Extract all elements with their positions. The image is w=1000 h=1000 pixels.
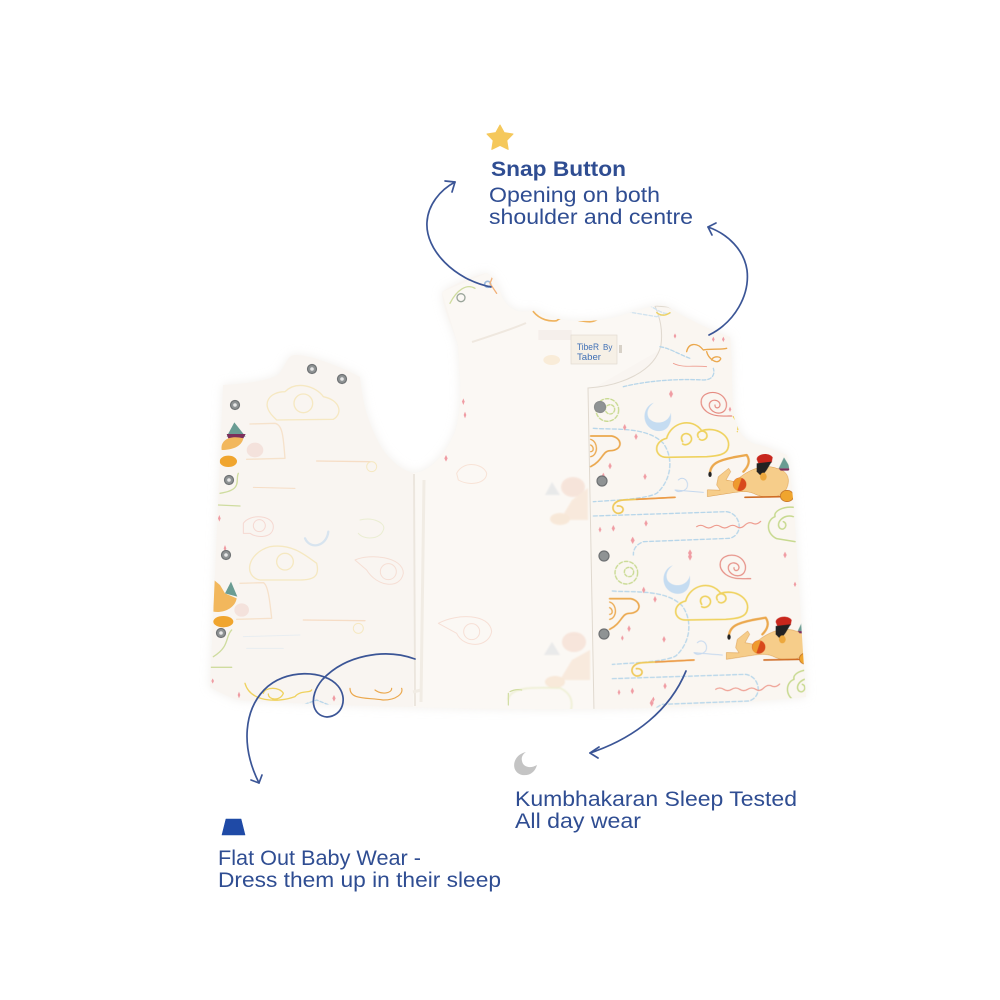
icon: yellow star [487, 125, 513, 149]
back panel [413, 273, 660, 710]
neck label tag: Taber [577, 352, 601, 363]
text: Flat Out Baby Wear: Dress them up in their sleep [218, 869, 501, 892]
icon: blue trapezoid [222, 819, 245, 835]
print seen on left edge and hem of left panel [210, 398, 522, 708]
neck label tag: TibeR [577, 342, 599, 353]
text: Kumbhakaran Sleep Tested [515, 788, 797, 833]
right panel print pattern [591, 390, 814, 721]
text: Kumbhakaran Sleep Tested: All day wear [515, 810, 641, 833]
heading: Snap Button: Snap Button [491, 158, 626, 181]
text: Kumbhakaran Sleep Tested: Kumbhakaran Sleep Tested [515, 788, 797, 811]
back collar print [533, 312, 598, 365]
icon: grey crescent moon [514, 752, 537, 775]
front right panel [588, 306, 671, 709]
garment: open baby vest [200, 260, 820, 721]
garment body and prints [200, 260, 820, 721]
arrow: shoulder snap to heading [427, 181, 491, 287]
arrow: hem to sleep tested [590, 671, 686, 758]
right shoulder print [623, 305, 796, 702]
back shoulder seam [472, 323, 526, 342]
arrow: right shoulder to heading [708, 223, 747, 335]
strap print on left back shoulder [450, 275, 497, 303]
arrow: looped arrow to flat out baby wear [247, 654, 415, 783]
left panel seam [414, 474, 415, 706]
garment shadow [210, 273, 806, 709]
faded print on left panel [234, 385, 492, 648]
snap buttons [216, 364, 609, 639]
neck label tag [571, 335, 622, 364]
placket seam [413, 480, 424, 702]
faded castle prints on back [508, 477, 590, 712]
neck label tag: By [603, 343, 612, 352]
text: Flat Out Baby Wear [218, 847, 501, 892]
text: Opening on both shoulder and centre: shoulder and centre [489, 206, 693, 229]
text: Opening on both shoulder and centre: Opening on both [489, 184, 660, 207]
text: Opening on both shoulder and centre [489, 184, 693, 229]
text: Flat Out Baby Wear: Flat Out Baby Wear - [218, 847, 421, 870]
